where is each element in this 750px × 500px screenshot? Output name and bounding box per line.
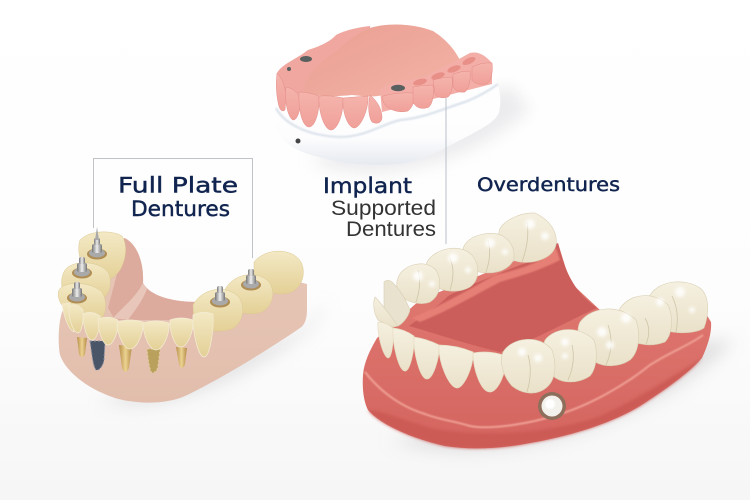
panel: overdentures model	[363, 213, 735, 451]
titanium implant screw	[90, 341, 105, 370]
pink base	[59, 238, 307, 403]
palate	[409, 243, 597, 352]
tooth creases	[416, 222, 677, 392]
callout frame	[94, 158, 252, 258]
front teeth	[378, 322, 506, 392]
rim highlight	[365, 335, 703, 427]
panel: implant supported dentures model	[274, 24, 530, 244]
inner palate	[108, 238, 215, 320]
heading: implant supported dentures	[323, 174, 436, 241]
base screw hole	[296, 138, 300, 144]
tooth highlights	[413, 219, 695, 362]
heading: full plate dentures: Dentures	[131, 197, 230, 221]
heading: full plate dentures	[118, 174, 238, 221]
gum base	[363, 243, 711, 448]
crowns left	[58, 232, 126, 320]
gold implant screw	[147, 349, 160, 373]
white base	[274, 73, 500, 165]
roots and implants	[77, 337, 187, 373]
heading: overdentures: Overdentures	[477, 174, 620, 196]
crowns right	[193, 251, 303, 331]
heading: full plate dentures: Full Plate	[118, 174, 238, 198]
heading: implant supported dentures: Dentures	[346, 218, 436, 241]
pink teeth	[276, 63, 492, 130]
connector line	[445, 98, 447, 244]
right gum ridge	[380, 52, 492, 112]
abutments	[67, 227, 261, 308]
heading: implant supported dentures: Implant	[323, 174, 412, 198]
front teeth	[62, 303, 213, 357]
heading: implant supported dentures: Supported	[331, 197, 436, 220]
palate	[302, 24, 461, 96]
panel: full plate dentures model	[58, 158, 330, 406]
implant screws	[287, 56, 405, 91]
front molars	[501, 282, 708, 393]
back molars	[374, 213, 556, 327]
retention button	[538, 392, 566, 420]
lower rim shade	[368, 358, 702, 448]
left gum ridge	[277, 26, 372, 96]
